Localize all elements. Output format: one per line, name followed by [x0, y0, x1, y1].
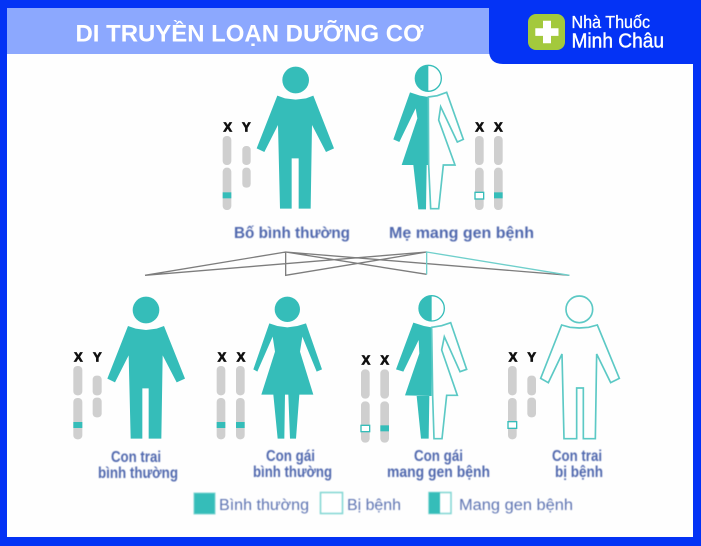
father figure and chromosomes [223, 67, 334, 210]
icon: normal son [107, 297, 185, 439]
carrier daughter [361, 296, 467, 443]
parent labels [234, 225, 534, 242]
brand name [572, 12, 664, 52]
icon: affected son [541, 296, 619, 439]
icon: normal daughter [253, 297, 322, 439]
child labels: bình thường [98, 465, 178, 482]
legend [194, 492, 573, 514]
parent labels: Mẹ mang gen bệnh [389, 225, 534, 242]
child labels: mang gen bệnh [387, 464, 490, 481]
legend: carrier: Mang gen bệnh [459, 497, 573, 514]
affected son [508, 296, 619, 439]
logo panel [489, 0, 701, 64]
legend: affected: Bị bệnh [347, 497, 401, 514]
mother figure and chromosomes [393, 65, 503, 210]
legend: normal [194, 493, 309, 514]
daughter chromosomes: X [237, 350, 246, 364]
child labels: Con gái [414, 448, 463, 465]
father chromosomes [223, 121, 251, 210]
title banner [7, 8, 490, 54]
affected son chromosomes: Y [527, 350, 536, 364]
affected son chromosomes [508, 350, 536, 439]
brand name: Nhà Thuốc [572, 12, 650, 32]
child labels [98, 448, 603, 482]
legend: normal: Bình thường [219, 497, 309, 514]
parent labels: Bố bình thường [234, 225, 350, 242]
son chromosomes: X [74, 350, 83, 364]
daughter chromosomes: X [218, 350, 227, 364]
inheritance lines [145, 252, 569, 275]
child labels: bình thường [253, 464, 332, 481]
child labels: Con gái [266, 448, 315, 465]
legend: carrier [429, 492, 573, 514]
father chromosomes: Y [242, 121, 251, 135]
affected son chromosomes: X [509, 350, 518, 364]
carrier chromosomes: X [362, 354, 371, 368]
logo: Nhà Thuốc Minh Châu [528, 12, 664, 52]
brand name: Minh Châu [572, 30, 664, 52]
child labels: bị bệnh [555, 464, 603, 481]
mother chromosomes: X [475, 121, 484, 135]
child labels: Con trai [552, 448, 602, 465]
son normal [73, 297, 185, 439]
title: DI TRUYỀN LOẠN DƯỠNG CƠ [76, 20, 424, 48]
carrier chromosomes [361, 354, 389, 443]
icon: green plus [528, 14, 565, 50]
daughter chromosomes [217, 350, 246, 439]
child labels: Con trai [111, 449, 161, 466]
mother chromosomes: X [494, 121, 503, 135]
father chromosomes: X [223, 121, 232, 135]
daughter normal [217, 297, 322, 439]
carrier chromosomes: X [380, 354, 389, 368]
son chromosomes [73, 350, 102, 439]
icon: mother carrier [393, 65, 463, 209]
icon: carrier daughter [396, 296, 467, 439]
mother chromosomes [475, 121, 503, 210]
icon: father [257, 67, 334, 209]
legend: affected [320, 492, 401, 514]
son chromosomes: Y [93, 350, 102, 364]
